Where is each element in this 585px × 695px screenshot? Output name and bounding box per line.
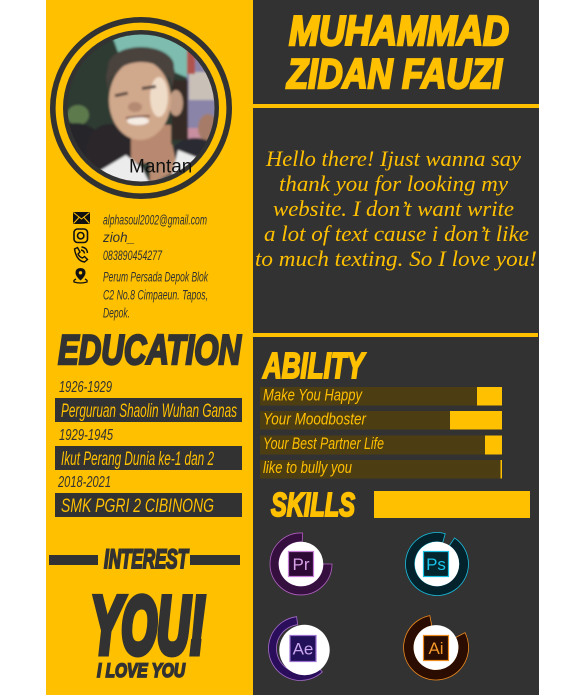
title: name: ZIDAN FAUZI xyxy=(286,50,503,97)
icon: premiere skill ring xyxy=(270,533,332,595)
introduction text: a lot of text cause i don’t like xyxy=(264,221,529,246)
title: name xyxy=(286,7,509,97)
contact details: C2 No.8 Cimpaeun. Tapos, xyxy=(103,288,208,302)
heading: skills xyxy=(271,486,530,523)
interest: i love you: I LOVE YOU xyxy=(97,660,186,682)
ability bars: Your Moodboster xyxy=(263,410,367,428)
icon: illustrator skill ring xyxy=(404,616,469,680)
icon: phone xyxy=(74,247,88,262)
icon: envelope xyxy=(73,212,90,224)
education timeline: 2018-2021 xyxy=(57,474,111,491)
icon: after effects skill ring: Ae xyxy=(293,640,313,658)
contact details xyxy=(102,212,209,320)
introduction text: website. I don’t want write xyxy=(273,196,514,221)
ability bars xyxy=(260,386,502,478)
heading: interest xyxy=(49,544,240,574)
education timeline: 1929-1945 xyxy=(59,427,113,444)
education timeline: Ikut Perang Dunia ke-1 dan 2 xyxy=(61,448,214,470)
photo caption: Mantan xyxy=(129,156,192,178)
education timeline: SMK PGRI 2 CIBINONG xyxy=(61,495,214,517)
contact details: 083890454277 xyxy=(103,248,162,263)
contact details: alphasoul2002@gmail.com xyxy=(103,212,207,228)
contact details: Perum Persada Depok Blok xyxy=(103,270,209,284)
contact details: zioh_ xyxy=(102,229,135,245)
panel: right content xyxy=(253,0,539,695)
heading: skills: SKILLS xyxy=(271,486,355,523)
ability bars: like to bully you xyxy=(263,458,352,477)
ability bars: Your Best Partner Life xyxy=(263,434,384,453)
heading: ability: ABILITY xyxy=(262,345,366,386)
introduction text xyxy=(255,146,537,271)
education timeline xyxy=(55,379,242,517)
icon: photoshop skill ring: Ps xyxy=(426,555,446,574)
interest: you: YOU! xyxy=(91,581,205,671)
heading: education: EDUCATION xyxy=(58,326,242,373)
title: name: MUHAMMAD xyxy=(289,7,509,54)
icon: photoshop skill ring xyxy=(405,533,468,596)
icon: instagram xyxy=(74,229,88,242)
icon: illustrator skill ring: Ai xyxy=(428,639,444,658)
introduction text: Hello there! Ijust wanna say xyxy=(265,146,521,171)
heading: interest: INTEREST xyxy=(104,544,190,574)
ability bars: Make You Happy xyxy=(263,386,363,404)
icon: after effects skill ring xyxy=(269,617,330,680)
contact details: Depok. xyxy=(103,306,130,320)
education timeline: Perguruan Shaolin Wuhan Ganas xyxy=(61,400,237,422)
profile photo with rings xyxy=(46,20,229,196)
introduction text: to much texting. So I love you! xyxy=(255,246,537,271)
icon: location pin xyxy=(74,268,87,283)
introduction text: thank you for looking my xyxy=(279,171,508,196)
icon: premiere skill ring: Pr xyxy=(292,555,310,574)
panel: left sidebar xyxy=(46,0,253,695)
education timeline: 1926-1929 xyxy=(59,379,112,396)
